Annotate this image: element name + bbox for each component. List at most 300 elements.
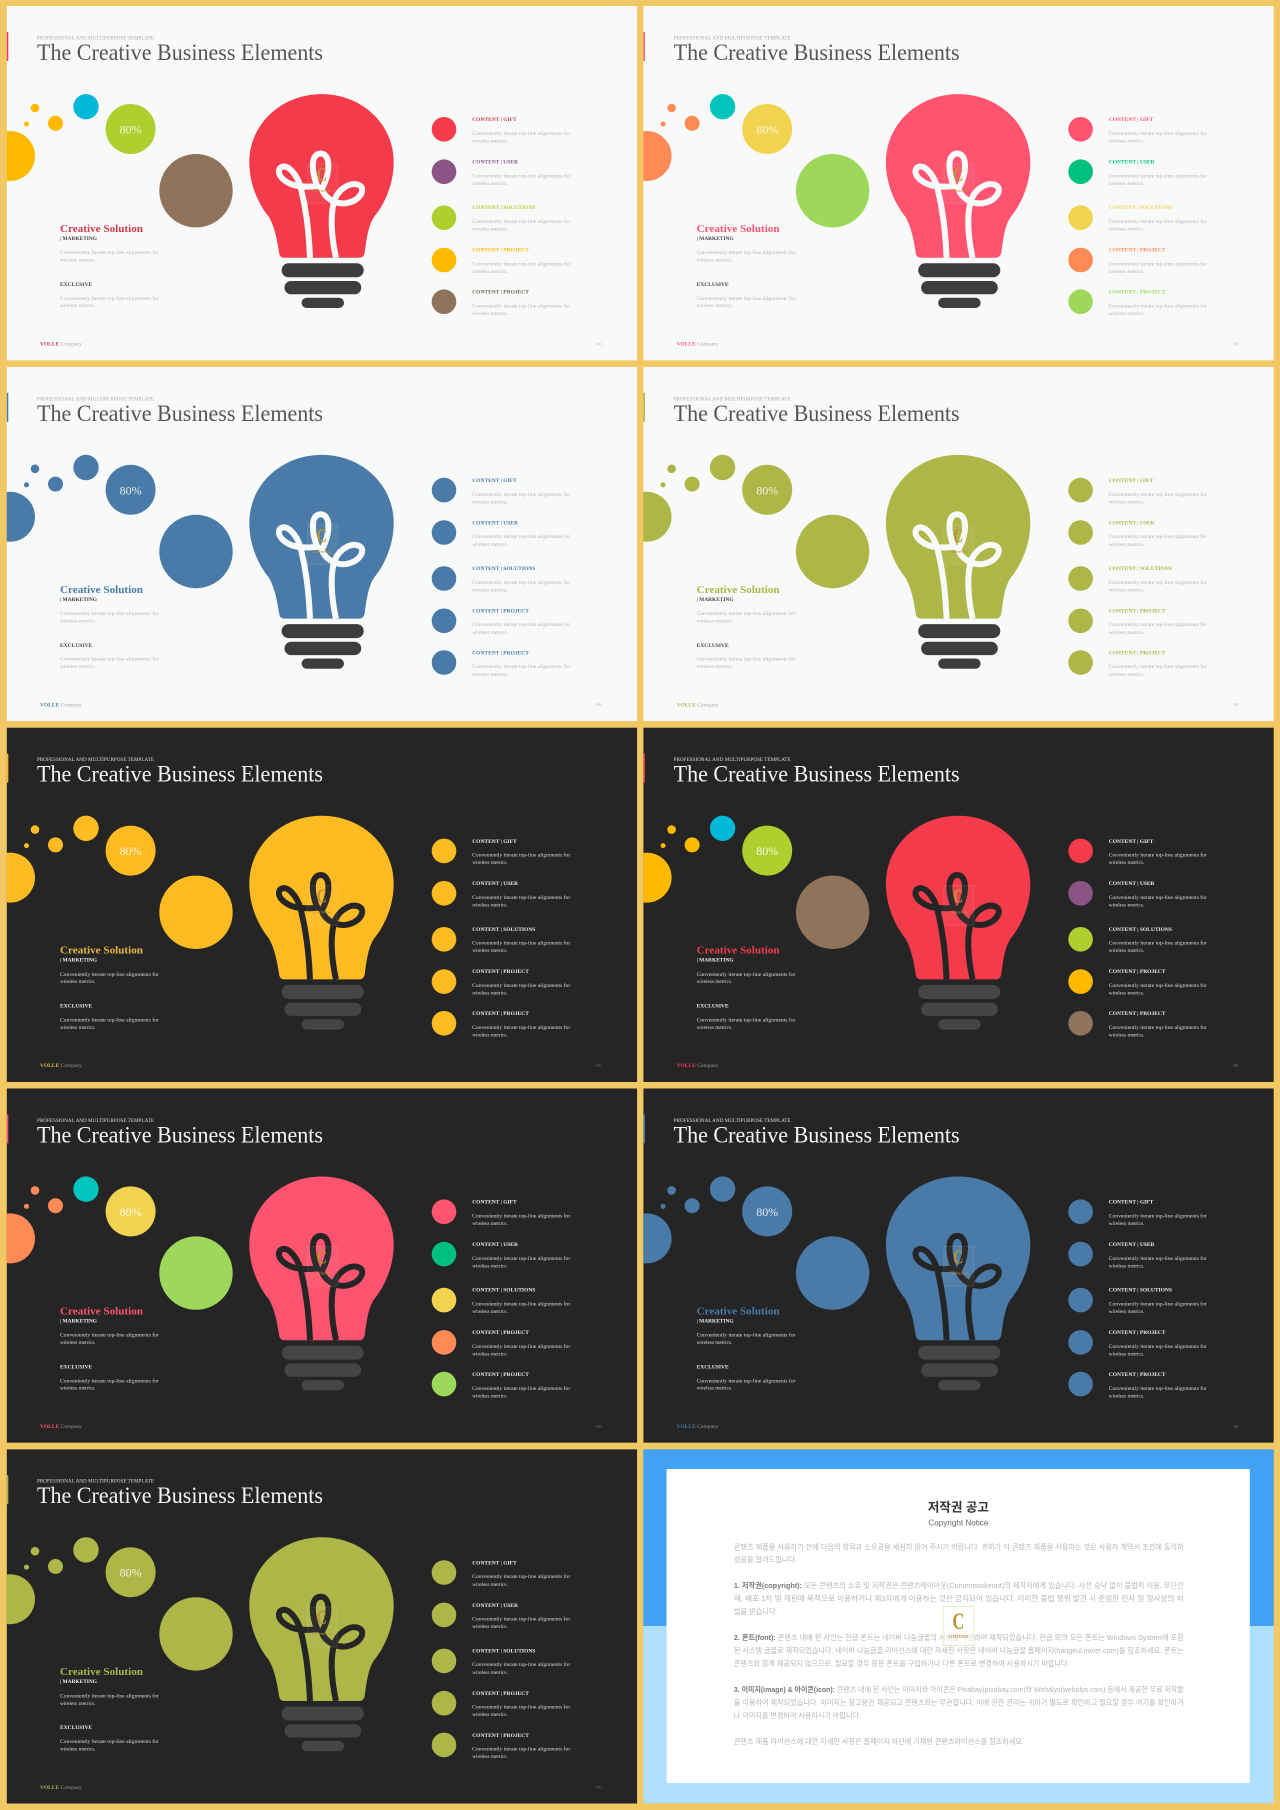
- list item: project 2: [432, 1011, 570, 1039]
- page number: / 06: [595, 1424, 602, 1429]
- list item: user: wireless metrics.: [1109, 542, 1144, 548]
- list item: user: wireless metrics.: [472, 181, 508, 187]
- list item: user: Conveniently iterate top-line alignments for: [472, 533, 570, 540]
- light bulb icon: [886, 816, 1030, 1030]
- list item: gift: Conveniently iterate top-line alignments for: [1109, 852, 1207, 859]
- notice body text: 을 이용하여 제작되었습니다. 이미지는 참고용만 제공되고 콘텐츠와는 무관합니다. 이에 관한 권리는 귀하가 별도로 확인하고 필요할 경우 여기를 확인하거: [734, 1698, 1184, 1707]
- left text block: Conveniently iterate top-line alignments for: [60, 610, 159, 617]
- footer: VOLLE Company: [40, 1424, 82, 1430]
- left text block: wireless metrics.: [697, 258, 732, 264]
- left text block: Conveniently iterate top-line alignments for: [60, 1692, 159, 1699]
- footer: VOLLE Company: [40, 1063, 82, 1069]
- list item: gift: [432, 839, 570, 866]
- notice body text: 된 시스템 글꼴로 제작되었습니다. 네이버 나눔글꼴 라이선스에 대한 자세한 사항은 네이버 나눔글꼴 홈페이지(hangeul.naver.com)를 참조하세요. 폰트는: [734, 1646, 1184, 1655]
- list item: project: CONTENT | PROJECT: [472, 248, 529, 254]
- notice body text: 3. 이미지(image) & 아이콘(icon): 콘텐츠 내에 된 사인는 이미지와 아이콘은 Pixabay(pixabay.com)와 Webalys(webalys.com) 등에서 제공한 무료 저작물: [734, 1685, 1184, 1694]
- left text block: Conveniently iterate top-line alignments for: [60, 1016, 159, 1023]
- list item: project 2: CONTENT | PROJECT: [472, 1733, 529, 1739]
- panel: slide 1 light multicolor: [0, 6, 637, 360]
- list item: solutions: CONTENT | SOLUTIONS: [472, 1288, 535, 1294]
- title: The Creative Business Elements: [37, 1483, 323, 1508]
- list item: project 2: Conveniently iterate top-line alignments for: [1109, 302, 1207, 309]
- list item: project 2: Conveniently iterate top-line alignments for: [1109, 1385, 1207, 1392]
- bubbles: [622, 94, 869, 227]
- list item: gift: CONTENT | GIFT: [1109, 117, 1154, 123]
- list item: gift: CONTENT | GIFT: [472, 1560, 517, 1566]
- left text block: wireless metrics.: [697, 664, 732, 670]
- white notice card: [666, 1469, 1250, 1783]
- footer: VOLLE Company: [677, 1424, 719, 1430]
- watermark: CONTENTS: [313, 189, 331, 193]
- notice body text: 콘텐츠와 함께 제공되지 않으므로, 필요할 경우 원문 폰트를 구입하거나 다른 폰트로 변경하여 사용하시기 바랍니다.: [734, 1659, 1069, 1668]
- list item: project 2: [1068, 289, 1207, 317]
- notice body text: 1. 저작권(copyright): 모든 콘텐츠의 소유 및 저작권은 콘텐츠레이아웃(Contentstokeout)의 제작자에게 있습니다. 사전 승낙 없이 불법적 이용, 무단전: [734, 1581, 1184, 1590]
- left text block: [60, 945, 159, 1031]
- list item: project: CONTENT | PROJECT: [1109, 969, 1166, 975]
- left text block: | MARKETING: [697, 958, 734, 964]
- list item: gift: [432, 1560, 570, 1588]
- list item: project 2: [432, 650, 570, 678]
- left text block: wireless metrics.: [60, 258, 96, 264]
- panel: slide 7 dark coral: [0, 1088, 637, 1443]
- left text block: Conveniently iterate top-line alignments for: [60, 1377, 159, 1384]
- watermark: CONTENTS: [949, 1271, 968, 1275]
- left text block: | MARKETING: [697, 236, 734, 242]
- panel: slide 6 dark multicolor: [622, 728, 1274, 1082]
- list item: user: Conveniently iterate top-line alignments for: [472, 1616, 570, 1623]
- notice body text: 나 이미지를 변경하여 사용하시기 바랍니다.: [734, 1711, 861, 1720]
- list item: user: wireless metrics.: [1109, 1263, 1144, 1269]
- page number: / 06: [1231, 1063, 1239, 1068]
- title: The Creative Business Elements: [37, 762, 323, 787]
- notice body text: 재, 배포 1차 및 재판매 목적으로 이용하거나 제3자에게 이용하는 것은 금지되어 있습니다. 이러한 불법 행위 발견 시 준엄한 민사 및 형사상의 처: [734, 1594, 1184, 1603]
- list item: gift: wireless metrics.: [472, 1582, 508, 1588]
- list item: user: [1068, 520, 1207, 548]
- page number: / 06: [595, 1785, 602, 1790]
- list item: user: wireless metrics.: [1109, 903, 1144, 909]
- list item: gift: Conveniently iterate top-line alignments for: [1109, 491, 1207, 498]
- left text block: [60, 1666, 159, 1752]
- watermark: [944, 885, 974, 925]
- left text block: EXCLUSIVE: [60, 1004, 92, 1010]
- list item: project: Conveniently iterate top-line alignments for: [1109, 1343, 1207, 1350]
- bubbles: [622, 1176, 869, 1310]
- list item: gift: wireless metrics.: [1109, 860, 1144, 866]
- list item: project 2: wireless metrics.: [1109, 1033, 1144, 1039]
- watermark: CONTENTS: [949, 911, 968, 915]
- left text block: Conveniently iterate top-line alignments for: [697, 971, 796, 978]
- list item: project 2: wireless metrics.: [472, 311, 508, 317]
- list item: user: CONTENT | USER: [1109, 160, 1156, 166]
- list item: solutions: wireless metrics.: [472, 227, 508, 233]
- list item: user: [1068, 159, 1207, 187]
- watermark: C: [953, 886, 963, 908]
- watermark: CONTENTS: [313, 550, 331, 554]
- list item: solutions: Conveniently iterate top-line alignments for: [472, 1300, 570, 1307]
- list item: project: Conveniently iterate top-line alignments for: [472, 1704, 570, 1711]
- left text block: | MARKETING: [60, 236, 98, 242]
- footer: VOLLE Company: [40, 342, 82, 348]
- list item: project 2: [1068, 650, 1207, 678]
- footer: VOLLE Company: [677, 1063, 719, 1069]
- list item: project: [1068, 969, 1207, 997]
- left text block: Conveniently iterate top-line alignments for: [697, 1016, 796, 1023]
- list item: gift: [1068, 478, 1207, 505]
- list item: solutions: Conveniently iterate top-line alignments for: [472, 940, 570, 947]
- list item: project: wireless metrics.: [472, 630, 508, 636]
- list item: project: CONTENT | PROJECT: [472, 969, 529, 975]
- watermark logo: [943, 1607, 974, 1646]
- panel: slide 9 dark olive: [0, 1449, 637, 1804]
- list item: project: CONTENT | PROJECT: [472, 608, 529, 614]
- light bulb icon: [886, 94, 1030, 308]
- footer: VOLLE Company: [677, 342, 719, 348]
- left text block: wireless metrics.: [697, 1386, 732, 1392]
- list item: user: [1068, 1242, 1207, 1269]
- list item: user: Conveniently iterate top-line alignments for: [1109, 1255, 1207, 1262]
- left text block: wireless metrics.: [697, 979, 732, 985]
- percentage label: 80%: [120, 1566, 142, 1580]
- panel: slide 4 light olive: [622, 367, 1274, 721]
- list item: user: CONTENT | USER: [472, 160, 519, 166]
- list item: project: Conveniently iterate top-line alignments for: [472, 982, 570, 989]
- list item: project 2: wireless metrics.: [472, 1393, 508, 1399]
- left text block: [697, 223, 796, 309]
- list item: solutions: Conveniently iterate top-line alignments for: [1109, 218, 1207, 225]
- list item: gift: Conveniently iterate top-line alignments for: [1109, 130, 1207, 137]
- list item: project 2: [1068, 1011, 1207, 1039]
- light bulb icon: [249, 94, 394, 308]
- notice heading: 저작권 공고: [928, 1500, 989, 1514]
- list item: project: Conveniently iterate top-line alignments for: [472, 260, 570, 267]
- list item: project: [432, 969, 570, 997]
- list item: solutions: wireless metrics.: [1109, 1309, 1144, 1315]
- subtitle: PROFESSIONAL AND MULTIPURPOSE TEMPLATE: [37, 397, 154, 402]
- left text block: [60, 1305, 159, 1392]
- left text block: wireless metrics.: [697, 303, 732, 309]
- subtitle: PROFESSIONAL AND MULTIPURPOSE TEMPLATE: [37, 1119, 154, 1124]
- footer: VOLLE Company: [677, 702, 719, 708]
- list item: project: [432, 1330, 570, 1357]
- left text block: EXCLUSIVE: [60, 1364, 92, 1370]
- left text block: Creative Solution: [60, 945, 143, 957]
- list item: gift: [432, 478, 570, 505]
- notice body text: 콘텐츠 제품을 사용하기 전에 다음의 항목과 소유권을 세심히 읽어 주시기 바랍니다. 귀하가 이 콘텐츠 제품을 사용하는 것은 사용자 계약서 조건에 동의하: [734, 1542, 1184, 1552]
- list item: project 2: CONTENT | PROJECT: [472, 290, 529, 296]
- list item: gift: CONTENT | GIFT: [1109, 839, 1154, 845]
- list item: project: wireless metrics.: [472, 269, 508, 275]
- left text block: [697, 1305, 796, 1392]
- watermark: CONTENTS: [313, 1271, 331, 1275]
- list item: gift: CONTENT | GIFT: [472, 117, 517, 123]
- watermark: [307, 885, 337, 925]
- list item: user: CONTENT | USER: [1109, 881, 1156, 887]
- left text block: [697, 945, 796, 1031]
- accent tab: [7, 1114, 8, 1143]
- list item: user: CONTENT | USER: [1109, 520, 1156, 526]
- left text block: wireless metrics.: [697, 1025, 732, 1031]
- watermark: C: [953, 525, 963, 547]
- left text block: wireless metrics.: [60, 979, 96, 985]
- list item: project: [432, 608, 570, 636]
- list item: user: wireless metrics.: [472, 1263, 508, 1269]
- bubbles: [0, 1176, 233, 1310]
- list item: project 2: Conveniently iterate top-line alignments for: [472, 1024, 570, 1031]
- watermark: C: [317, 886, 327, 908]
- panel: slide 3 light blue: [0, 367, 637, 721]
- page number: / 06: [595, 702, 602, 707]
- panel: slide 5 dark yellow: [0, 728, 637, 1082]
- list item: project 2: Conveniently iterate top-line alignments for: [1109, 663, 1207, 670]
- left text block: wireless metrics.: [60, 1746, 96, 1752]
- list item: user: [432, 159, 570, 187]
- accent tab: [7, 32, 8, 61]
- notice body text: 벌을 받습니다.: [734, 1607, 778, 1616]
- left text block: EXCLUSIVE: [60, 643, 92, 649]
- list item: project 2: [1068, 1372, 1207, 1399]
- light bulb icon: [886, 1176, 1030, 1390]
- list item: project 2: CONTENT | PROJECT: [472, 1372, 529, 1378]
- title: The Creative Business Elements: [37, 1122, 323, 1147]
- list item: project 2: wireless metrics.: [472, 1033, 508, 1039]
- light bulb icon: [249, 1537, 394, 1751]
- list item: project: [432, 1691, 570, 1718]
- subtitle: PROFESSIONAL AND MULTIPURPOSE TEMPLATE: [37, 758, 154, 763]
- list item: gift: [1068, 1199, 1207, 1227]
- list item: project: wireless metrics.: [1109, 630, 1144, 636]
- list item: user: CONTENT | USER: [472, 881, 519, 887]
- notice subheading: Copyright Notice: [928, 1518, 989, 1528]
- left text block: wireless metrics.: [60, 664, 96, 670]
- list item: gift: [432, 1199, 570, 1227]
- subtitle: PROFESSIONAL AND MULTIPURPOSE TEMPLATE: [674, 397, 791, 402]
- left text block: [697, 584, 796, 670]
- left text block: wireless metrics.: [60, 1025, 96, 1031]
- list item: project: wireless metrics.: [472, 1712, 508, 1718]
- subtitle: PROFESSIONAL AND MULTIPURPOSE TEMPLATE: [674, 36, 791, 42]
- left text block: | MARKETING: [60, 1679, 98, 1685]
- list item: solutions: wireless metrics.: [1109, 587, 1144, 593]
- list item: user: Conveniently iterate top-line alignments for: [472, 894, 570, 901]
- page number: / 06: [1231, 1424, 1239, 1429]
- left text block: [60, 584, 159, 670]
- list item: solutions: Conveniently iterate top-line alignments for: [1109, 940, 1207, 947]
- list item: project: [1068, 248, 1207, 275]
- left text block: EXCLUSIVE: [697, 1004, 729, 1010]
- page number: / 06: [595, 341, 602, 346]
- list item: gift: wireless metrics.: [1109, 139, 1144, 145]
- left text block: Conveniently iterate top-line alignments for: [60, 656, 159, 663]
- bubbles: [622, 455, 869, 588]
- page number: / 06: [1231, 702, 1239, 707]
- list item: user: CONTENT | USER: [472, 520, 519, 526]
- percentage label: 80%: [756, 483, 778, 497]
- list item: solutions: [432, 205, 570, 233]
- list item: user: Conveniently iterate top-line alignments for: [1109, 172, 1207, 179]
- list item: project 2: CONTENT | PROJECT: [1109, 1372, 1166, 1378]
- list item: gift: wireless metrics.: [472, 1221, 508, 1227]
- watermark: C: [953, 164, 963, 186]
- left text block: Conveniently iterate top-line alignments for: [60, 1332, 159, 1339]
- list item: project 2: wireless metrics.: [1109, 1393, 1144, 1399]
- left text block: Conveniently iterate top-line alignments for: [697, 656, 796, 663]
- list item: gift: CONTENT | GIFT: [472, 1200, 517, 1206]
- left text block: EXCLUSIVE: [60, 1725, 92, 1731]
- list item: project 2: CONTENT | PROJECT: [472, 1011, 529, 1017]
- left text block: Creative Solution: [697, 584, 780, 596]
- list item: solutions: Conveniently iterate top-line alignments for: [472, 1661, 570, 1668]
- list item: solutions: CONTENT | SOLUTIONS: [472, 927, 535, 933]
- left text block: Conveniently iterate top-line alignments for: [697, 610, 796, 617]
- title: The Creative Business Elements: [37, 401, 323, 426]
- list item: user: wireless metrics.: [472, 903, 508, 909]
- accent tab: [7, 1475, 8, 1504]
- left text block: wireless metrics.: [60, 1386, 96, 1392]
- list item: gift: wireless metrics.: [472, 139, 508, 145]
- list item: gift: Conveniently iterate top-line alignments for: [472, 852, 570, 859]
- list item: solutions: Conveniently iterate top-line alignments for: [472, 579, 570, 586]
- list item: project 2: CONTENT | PROJECT: [472, 650, 529, 656]
- list item: gift: CONTENT | GIFT: [1109, 1200, 1154, 1206]
- accent tab: [7, 393, 8, 422]
- page number: / 06: [595, 1063, 602, 1068]
- list item: gift: [1068, 117, 1207, 145]
- list item: gift: Conveniently iterate top-line alignments for: [472, 491, 570, 498]
- panel: slide 8 dark blue: [622, 1088, 1274, 1443]
- left text block: Creative Solution: [697, 223, 780, 235]
- percentage label: 80%: [120, 122, 142, 136]
- left text block: EXCLUSIVE: [697, 282, 729, 288]
- watermark: C: [953, 1246, 963, 1268]
- list item: project: wireless metrics.: [1109, 269, 1144, 275]
- notice body text: 콘텐츠 제품 라이선스에 대한 자세한 사항은 홈페이지 하단에 기재된 콘텐츠라이선스를 참조하세요.: [734, 1737, 1024, 1746]
- left text block: wireless metrics.: [60, 303, 96, 309]
- left text block: Creative Solution: [60, 1305, 143, 1317]
- list item: solutions: wireless metrics.: [472, 1670, 508, 1676]
- left text block: | MARKETING: [60, 597, 98, 603]
- list item: project: wireless metrics.: [1109, 1351, 1144, 1357]
- list item: solutions: wireless metrics.: [1109, 227, 1144, 233]
- list item: gift: [1068, 839, 1207, 866]
- list item: project 2: CONTENT | PROJECT: [1109, 1011, 1166, 1017]
- footer: VOLLE Company: [40, 702, 82, 708]
- left text block: wireless metrics.: [697, 1340, 732, 1346]
- list item: project: CONTENT | PROJECT: [1109, 248, 1166, 254]
- list item: solutions: CONTENT | SOLUTIONS: [1109, 566, 1172, 572]
- bubbles: [0, 1537, 233, 1671]
- left text block: Creative Solution: [60, 1666, 143, 1678]
- left text block: Conveniently iterate top-line alignments for: [60, 1738, 159, 1745]
- left text block: Conveniently iterate top-line alignments for: [60, 249, 159, 256]
- list item: project 2: wireless metrics.: [1109, 672, 1144, 678]
- left text block: wireless metrics.: [60, 1701, 96, 1707]
- list item: solutions: wireless metrics.: [472, 587, 508, 593]
- list item: project: [1068, 608, 1207, 636]
- watermark: [307, 525, 337, 565]
- subtitle: PROFESSIONAL AND MULTIPURPOSE TEMPLATE: [37, 36, 154, 42]
- light bulb icon: [249, 455, 394, 669]
- left text block: EXCLUSIVE: [697, 643, 729, 649]
- list item: solutions: Conveniently iterate top-line alignments for: [1109, 579, 1207, 586]
- list item: project: Conveniently iterate top-line alignments for: [1109, 621, 1207, 628]
- list item: project: [1068, 1330, 1207, 1357]
- list item: solutions: [1068, 1288, 1207, 1315]
- list item: user: [432, 881, 570, 909]
- bubbles: [0, 455, 233, 588]
- left text block: Creative Solution: [697, 945, 780, 957]
- list item: project: Conveniently iterate top-line alignments for: [472, 621, 570, 628]
- list item: user: Conveniently iterate top-line alignments for: [1109, 894, 1207, 901]
- list item: project: Conveniently iterate top-line alignments for: [1109, 260, 1207, 267]
- left text block: | MARKETING: [60, 958, 98, 964]
- notice body text: 셨음을 알려드립니다.: [734, 1555, 797, 1564]
- list item: solutions: Conveniently iterate top-line alignments for: [1109, 1300, 1207, 1307]
- left text block: Conveniently iterate top-line alignments for: [697, 295, 796, 302]
- left text block: Conveniently iterate top-line alignments for: [60, 971, 159, 978]
- list item: solutions: CONTENT | SOLUTIONS: [472, 1648, 535, 1654]
- list item: project: Conveniently iterate top-line alignments for: [1109, 982, 1207, 989]
- left text block: Conveniently iterate top-line alignments for: [697, 249, 796, 256]
- list item: project 2: [432, 289, 570, 317]
- list item: user: CONTENT | USER: [472, 1242, 519, 1248]
- list item: user: [432, 520, 570, 548]
- left text block: EXCLUSIVE: [60, 282, 92, 288]
- list item: solutions: [432, 1648, 570, 1676]
- percentage label: 80%: [756, 844, 778, 858]
- title: The Creative Business Elements: [674, 1122, 960, 1147]
- list item: user: wireless metrics.: [472, 1624, 508, 1630]
- list item: project: wireless metrics.: [472, 1351, 508, 1357]
- left text block: wireless metrics.: [60, 618, 96, 624]
- list item: solutions: Conveniently iterate top-line alignments for: [472, 218, 570, 225]
- list item: gift: CONTENT | GIFT: [1109, 478, 1154, 484]
- percentage label: 80%: [756, 122, 778, 136]
- list item: project 2: Conveniently iterate top-line alignments for: [472, 1746, 570, 1753]
- watermark: [944, 1246, 974, 1286]
- percentage label: 80%: [120, 844, 142, 858]
- list item: solutions: CONTENT | SOLUTIONS: [472, 566, 535, 572]
- list item: solutions: [1068, 566, 1207, 593]
- list item: user: [432, 1242, 570, 1269]
- list item: solutions: [432, 566, 570, 593]
- list item: solutions: wireless metrics.: [472, 1309, 508, 1315]
- watermark: [307, 1246, 337, 1286]
- left text block: EXCLUSIVE: [697, 1364, 729, 1370]
- list item: project: CONTENT | PROJECT: [1109, 1330, 1166, 1336]
- list item: project: CONTENT | PROJECT: [1109, 608, 1166, 614]
- title: The Creative Business Elements: [37, 40, 323, 65]
- list item: solutions: CONTENT | SOLUTIONS: [1109, 1288, 1172, 1294]
- notice body text: [734, 1542, 1184, 1746]
- list item: project 2: wireless metrics.: [472, 1754, 508, 1760]
- list item: project 2: wireless metrics.: [1109, 311, 1144, 317]
- list item: project: CONTENT | PROJECT: [472, 1330, 529, 1336]
- percentage label: 80%: [756, 1205, 778, 1219]
- watermark logo: CONTENTS: [949, 1635, 968, 1639]
- list item: user: [432, 1603, 570, 1630]
- list item: user: CONTENT | USER: [1109, 1242, 1156, 1248]
- list item: gift: wireless metrics.: [1109, 1221, 1144, 1227]
- list item: project: CONTENT | PROJECT: [472, 1691, 529, 1697]
- watermark: [307, 1607, 337, 1647]
- title: The Creative Business Elements: [674, 40, 960, 65]
- panel: slide 2 light coral: [622, 6, 1274, 360]
- subtitle: PROFESSIONAL AND MULTIPURPOSE TEMPLATE: [37, 1480, 154, 1485]
- list item: solutions: CONTENT | SOLUTIONS: [1109, 927, 1172, 933]
- left text block: wireless metrics.: [697, 618, 732, 624]
- list item: gift: wireless metrics.: [1109, 499, 1144, 505]
- list item: user: Conveniently iterate top-line alignments for: [472, 1255, 570, 1262]
